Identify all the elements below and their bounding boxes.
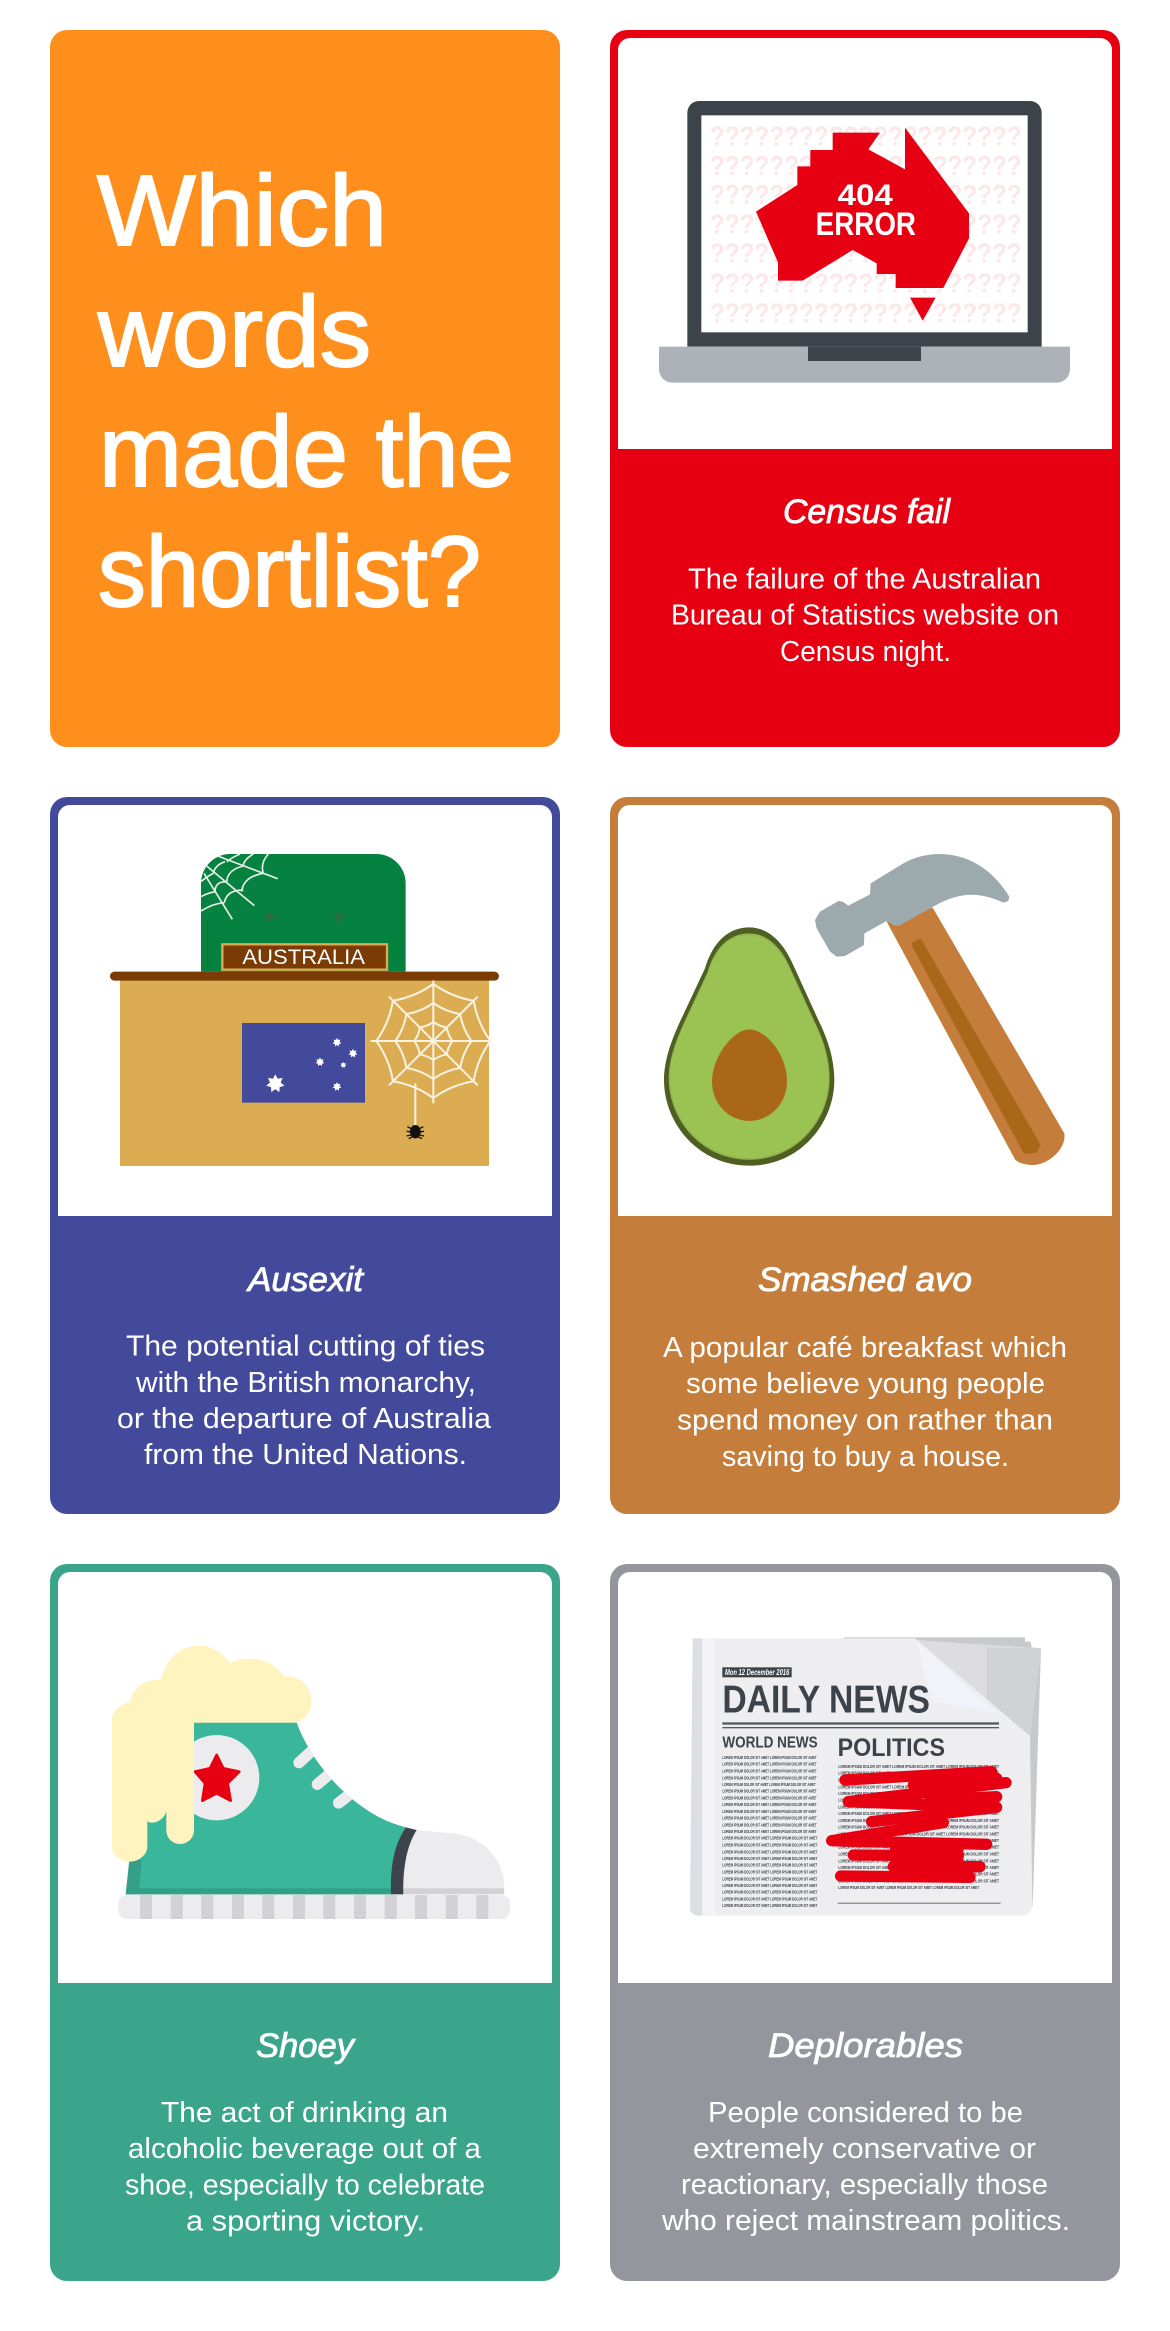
icon: laptop with 404 error map: ????????????????????? [710, 297, 1022, 328]
icon: newspaper with redacted article: LOREM IPSUM DOLOR SIT AMET LOREM IPSUM DOLOR SIT AMET LOREM IPSUM DOLOR SIT AMET [838, 1865, 999, 1870]
icon: newspaper with redacted article: LOREM IPSUM DOLOR SIT AMET LOREM IPSUM DOLOR SIT AMET [722, 1890, 818, 1895]
icon: newspaper with redacted article: LOREM IPSUM DOLOR SIT AMET LOREM IPSUM DOLOR SIT AMET LOREM IPSUM DOLOR SIT AMET [838, 1818, 999, 1823]
definition: Smashed avo: some believe young people [686, 1368, 1045, 1400]
icon: laptop with 404 error map: ????????????????????? [710, 208, 1022, 239]
definition: Shoey: shoe, especially to celebrate [125, 2170, 485, 2202]
icon: newspaper with redacted article: LOREM IPSUM DOLOR SIT AMET LOREM IPSUM DOLOR SIT AMET LOREM IPSUM DOLOR SIT AMET [838, 1885, 979, 1890]
definition: Deplorables: reactionary, especially those [681, 2169, 1048, 2201]
heading: title text: shortlist? [98, 516, 481, 628]
icon: newspaper with redacted article: LOREM IPSUM DOLOR SIT AMET LOREM IPSUM DOLOR SIT AMET LOREM IPSUM DOLOR SIT AMET [838, 1811, 999, 1816]
icon: newspaper with redacted article: LOREM IPSUM DOLOR SIT AMET LOREM IPSUM DOLOR SIT AMET [722, 1876, 818, 1881]
icon: newspaper with redacted article: LOREM IPSUM DOLOR SIT AMET LOREM IPSUM DOLOR SIT AMET LOREM IPSUM DOLOR SIT AMET [838, 1831, 999, 1836]
icon: newspaper with redacted article: LOREM IPSUM DOLOR SIT AMET LOREM IPSUM DOLOR SIT AMET LOREM IPSUM DOLOR SIT AMET [838, 1791, 999, 1796]
icon: laptop with 404 error map: ????????????????????? [710, 150, 1022, 181]
heading: title text [97, 155, 514, 628]
definition: Shoey [125, 2097, 485, 2238]
icon: newspaper with redacted article: LOREM IPSUM DOLOR SIT AMET LOREM IPSUM DOLOR SIT AMET [722, 1816, 817, 1821]
icon: newspaper with redacted article: LOREM IPSUM DOLOR SIT AMET LOREM IPSUM DOLOR SIT AMET [722, 1849, 818, 1854]
icon: newspaper with redacted article: LOREM IPSUM DOLOR SIT AMET LOREM IPSUM DOLOR SIT AMET [722, 1795, 817, 1800]
icon: laptop with 404 error map: ????????????????????? [710, 238, 1022, 269]
icon: newspaper with redacted article: LOREM IPSUM DOLOR SIT AMET LOREM IPSUM DOLOR SIT AMET [722, 1903, 818, 1908]
definition: Shoey: alcoholic beverage out of a [128, 2133, 482, 2165]
panel: Smashed avo [610, 797, 1120, 1514]
definition: Ausexit [117, 1330, 492, 1471]
definition: Census fail [671, 564, 1059, 668]
definition: Deplorables: extremely conservative or [693, 2133, 1036, 2165]
definition: Ausexit: or the departure of Australia [117, 1403, 492, 1435]
panel: Deplorables [610, 1564, 1120, 2281]
icon: newspaper with redacted article: LOREM IPSUM DOLOR SIT AMET LOREM IPSUM DOLOR SIT AMET LOREM IPSUM DOLOR SIT AMET [838, 1872, 999, 1877]
icon: sneaker overflowing with beer foam [112, 1646, 510, 1919]
icon: laptop with 404 error map: ERROR [816, 206, 916, 242]
icon: newspaper with redacted article: LOREM IPSUM DOLOR SIT AMET LOREM IPSUM DOLOR SIT AMET LOREM IPSUM DOLOR SIT AMET [838, 1825, 999, 1830]
icon: newspaper with redacted article: LOREM IPSUM DOLOR SIT AMET LOREM IPSUM DOLOR SIT AMET [722, 1802, 817, 1807]
icon: laptop with 404 error map [659, 101, 1070, 383]
definition: Census fail: Bureau of Statistics website on [671, 600, 1059, 632]
icon: newspaper with redacted article: LOREM IPSUM DOLOR SIT AMET LOREM IPSUM DOLOR SIT AMET [722, 1809, 817, 1814]
heading: title text: made the [99, 396, 514, 508]
icon: newspaper with redacted article: LOREM IPSUM DOLOR SIT AMET LOREM IPSUM DOLOR SIT AMET LOREM IPSUM DOLOR SIT AMET [838, 1798, 999, 1803]
icon: laptop with 404 error map: ????????????????????? [710, 121, 1022, 152]
icon: newspaper with redacted article: LOREM IPSUM DOLOR SIT AMET LOREM IPSUM DOLOR SIT AMET LOREM IPSUM DOLOR SIT AMET [838, 1777, 999, 1782]
word title: Shoey: Shoey [256, 2027, 356, 2065]
icon: newspaper with redacted article: LOREM IPSUM DOLOR SIT AMET LOREM IPSUM DOLOR SIT AMET LOREM IPSUM DOLOR SIT AMET [838, 1784, 999, 1789]
definition: Ausexit: from the United Nations. [144, 1439, 467, 1471]
panel: Census fail [610, 30, 1120, 747]
icon: newspaper with redacted article: LOREM IPSUM DOLOR SIT AMET LOREM IPSUM DOLOR SIT AMET [722, 1843, 818, 1848]
icon: newspaper with redacted article: POLITICS [838, 1735, 945, 1762]
definition: Smashed avo: spend money on rather than [677, 1404, 1053, 1436]
definition: Shoey: The act of drinking an [161, 2097, 448, 2129]
icon: newspaper with redacted article: LOREM IPSUM DOLOR SIT AMET LOREM IPSUM DOLOR SIT AMET LOREM IPSUM DOLOR SIT AMET [838, 1771, 999, 1776]
icon: newspaper with redacted article: LOREM IPSUM DOLOR SIT AMET LOREM IPSUM DOLOR SIT AMET [722, 1762, 817, 1767]
icon: abandoned Australia desk with cobwebs: AUSTRALIA [242, 945, 366, 969]
icon: newspaper with redacted article: Mon 12 December 2016 [725, 1667, 790, 1677]
icon: newspaper with redacted article: LOREM IPSUM DOLOR SIT AMET LOREM IPSUM DOLOR SIT AMET LOREM IPSUM DOLOR SIT AMET [838, 1845, 999, 1850]
definition: Census fail: Census night. [780, 636, 951, 668]
icon: newspaper with redacted article: LOREM IPSUM DOLOR SIT AMET LOREM IPSUM DOLOR SIT AMET [722, 1883, 818, 1888]
icon: newspaper with redacted article: LOREM IPSUM DOLOR SIT AMET LOREM IPSUM DOLOR SIT AMET LOREM IPSUM DOLOR SIT AMET [838, 1764, 999, 1769]
icon: newspaper with redacted article: LOREM IPSUM DOLOR SIT AMET LOREM IPSUM DOLOR SIT AMET LOREM IPSUM DOLOR SIT AMET [838, 1838, 999, 1843]
word title: Census fail: Census fail [783, 493, 951, 531]
icon: newspaper with redacted article: LOREM IPSUM DOLOR SIT AMET LOREM IPSUM DOLOR SIT AMET [722, 1755, 817, 1760]
definition: Ausexit: The potential cutting of ties [126, 1330, 485, 1362]
panel: title [50, 30, 560, 747]
definition: Smashed avo: saving to buy a house. [722, 1441, 1009, 1473]
icon: newspaper with redacted article: LOREM IPSUM DOLOR SIT AMET LOREM IPSUM DOLOR SIT AMET LOREM IPSUM DOLOR SIT AMET [838, 1878, 999, 1883]
icon: laptop with 404 error map: ????????????????????? [710, 267, 1022, 298]
icon: newspaper with redacted article: LOREM IPSUM DOLOR SIT AMET LOREM IPSUM DOLOR SIT AMET [722, 1836, 818, 1841]
icon: laptop with 404 error map: 404 [838, 179, 893, 212]
icon: newspaper with redacted article: LOREM IPSUM DOLOR SIT AMET LOREM IPSUM DOLOR SIT AMET [722, 1829, 817, 1834]
definition: Deplorables: who reject mainstream politics. [661, 2205, 1070, 2237]
word title: Deplorables: Deplorables [768, 2027, 963, 2065]
icon: newspaper with redacted article: LOREM IPSUM DOLOR SIT AMET LOREM IPSUM DOLOR SIT AMET [722, 1768, 817, 1773]
icon: newspaper with redacted article: WORLD NEWS [722, 1735, 818, 1752]
icon: hammer [815, 854, 1065, 1165]
icon: newspaper with redacted article: LOREM IPSUM DOLOR SIT AMET LOREM IPSUM DOLOR SIT AMET LOREM IPSUM DOLOR SIT AMET [838, 1804, 999, 1809]
heading: title text: words [97, 276, 371, 388]
word title: Smashed avo: Smashed avo [758, 1261, 972, 1299]
panel: Shoey [50, 1564, 560, 2281]
panel: Ausexit [50, 797, 560, 1514]
icon: newspaper with redacted article: LOREM IPSUM DOLOR SIT AMET LOREM IPSUM DOLOR SIT AMET LOREM IPSUM DOLOR SIT AMET [838, 1858, 999, 1863]
definition: Ausexit: with the British monarchy, [135, 1367, 476, 1399]
icon: newspaper with redacted article: LOREM IPSUM DOLOR SIT AMET LOREM IPSUM DOLOR SIT AMET [722, 1789, 817, 1794]
definition: Smashed avo: A popular café breakfast which [663, 1332, 1067, 1364]
icon: newspaper with redacted article: LOREM IPSUM DOLOR SIT AMET LOREM IPSUM DOLOR SIT AMET [722, 1782, 816, 1787]
icon: newspaper with redacted article: LOREM IPSUM DOLOR SIT AMET LOREM IPSUM DOLOR SIT AMET [722, 1863, 818, 1868]
icon: newspaper with redacted article [690, 1637, 1041, 1916]
icon: newspaper with redacted article: LOREM IPSUM DOLOR SIT AMET LOREM IPSUM DOLOR SIT AMET [722, 1775, 817, 1780]
icon: abandoned Australia desk with cobwebs [110, 854, 499, 1166]
definition: Deplorables: People considered to be [708, 2097, 1023, 2129]
icon: laptop with 404 error map: ????????????????????? [710, 179, 1022, 210]
word title: Ausexit: Ausexit [246, 1261, 365, 1299]
icon: newspaper with redacted article: LOREM IPSUM DOLOR SIT AMET LOREM IPSUM DOLOR SIT AMET [722, 1869, 818, 1874]
icon: newspaper with redacted article: LOREM IPSUM DOLOR SIT AMET LOREM IPSUM DOLOR SIT AMET [722, 1896, 818, 1901]
definition: Shoey: a sporting victory. [186, 2206, 425, 2238]
icon: newspaper with redacted article: LOREM IPSUM DOLOR SIT AMET LOREM IPSUM DOLOR SIT AMET [722, 1822, 817, 1827]
icon: avocado half [664, 927, 834, 1166]
icon: newspaper with redacted article: LOREM IPSUM DOLOR SIT AMET LOREM IPSUM DOLOR SIT AMET [722, 1856, 818, 1861]
heading: title text: Which [97, 155, 387, 267]
icon: newspaper with redacted article: LOREM IPSUM DOLOR SIT AMET LOREM IPSUM DOLOR SIT AMET LOREM IPSUM DOLOR SIT AMET [838, 1852, 999, 1857]
definition: Census fail: The failure of the Australian [688, 564, 1041, 596]
definition: Smashed avo [663, 1332, 1067, 1473]
icon: newspaper with redacted article: DAILY NEWS [722, 1679, 930, 1722]
definition: Deplorables [661, 2097, 1070, 2237]
